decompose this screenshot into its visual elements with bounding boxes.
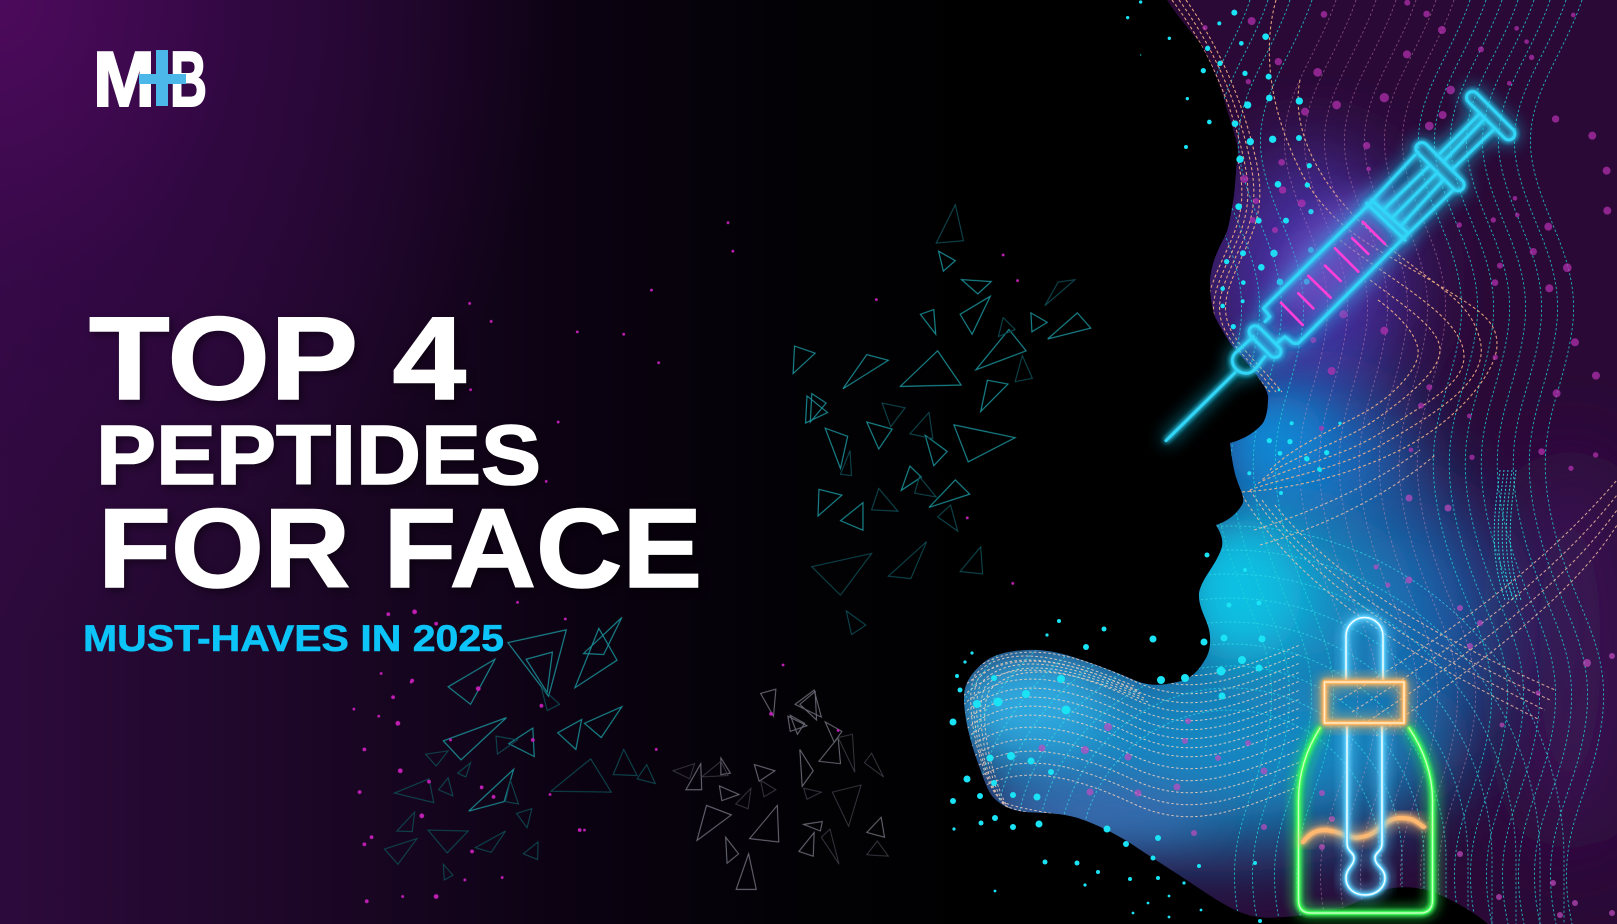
dots: cyan particles: [1126, 0, 1342, 475]
title: [89, 293, 702, 611]
logo: [93, 35, 207, 123]
dotted wave lines: [896, 0, 1617, 924]
dots: lower pink particles: [1038, 494, 1615, 918]
dropper pipette: [1346, 618, 1385, 895]
illustration: face silhouette field: [896, 0, 1617, 924]
icon: neon syringe: [1166, 89, 1517, 441]
logo: B: [170, 35, 207, 123]
dots: lower cyan particles: [950, 456, 1322, 923]
bottle body: [1298, 728, 1432, 913]
dropper cap: [1324, 682, 1404, 723]
title: PEPTIDES: [96, 408, 541, 502]
logo: M: [93, 35, 155, 123]
particles: triangle fragments: [352, 205, 1091, 903]
liquid wave: [1303, 818, 1424, 842]
title: TOP 4: [89, 293, 466, 425]
subtitle: MUST-HAVES IN 2025: [83, 618, 504, 659]
logo plus sign: [139, 50, 186, 106]
dots: pink particles: [1202, 0, 1611, 471]
icon: neon dropper bottle: [1298, 618, 1432, 913]
title: FOR FACE: [98, 486, 702, 611]
